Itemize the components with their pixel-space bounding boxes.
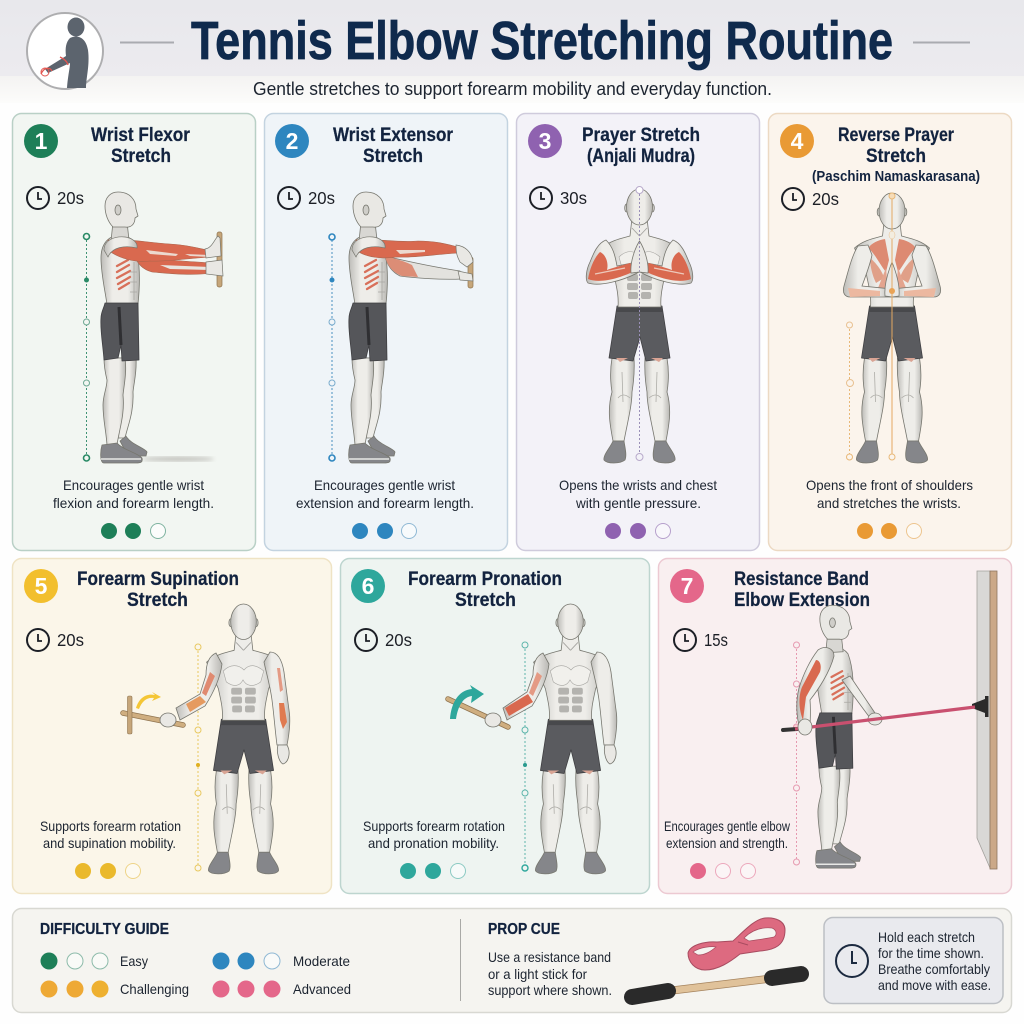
heading: Reverse Prayer: [838, 125, 955, 146]
number badge 4: 4: [791, 128, 804, 154]
heading: [333, 125, 454, 167]
number badge 1: [24, 124, 58, 158]
legend: easy: [40, 952, 148, 970]
description: with gentle pressure.: [575, 495, 701, 511]
heading: Wrist Extensor: [333, 125, 454, 146]
heading: Stretch: [455, 590, 516, 611]
description: [296, 477, 474, 511]
timer: [530, 187, 587, 209]
hold text: Hold each stretch: [878, 929, 975, 945]
description: [363, 818, 505, 851]
icon: resistance band: [688, 918, 785, 970]
difficulty dots: [75, 863, 140, 879]
timer: 20s: [308, 188, 335, 208]
alignment line: [195, 644, 201, 871]
timer: 20s: [812, 189, 839, 209]
number badge 7: [670, 569, 704, 603]
number badge 5: [24, 569, 58, 603]
number badge 4: [780, 124, 814, 158]
heading: [77, 569, 239, 611]
description: Supports forearm rotation: [363, 818, 505, 834]
panel: 2 wrist extensor stretch: [264, 114, 508, 550]
number badge 3: 3: [539, 128, 551, 154]
heading: [408, 569, 562, 611]
heading: Forearm Supination: [77, 569, 239, 590]
heading: Stretch: [866, 146, 926, 167]
timer: 20s: [57, 188, 84, 208]
heading: Stretch: [127, 590, 188, 611]
description: and supination mobility.: [43, 835, 176, 851]
difficulty dots: [605, 523, 670, 539]
prop cue text: support where shown.: [488, 982, 612, 998]
title: Tennis Elbow Stretching Routine: [191, 11, 893, 71]
description: [806, 477, 973, 511]
panel: 6 forearm pronation stretch: [340, 558, 650, 894]
header icon: silhouette with painful elbow: [27, 13, 103, 89]
description: Encourages gentle elbow: [664, 818, 791, 834]
number badge 1: 1: [35, 128, 48, 154]
difficulty dots: [101, 523, 166, 539]
wall with anchor: [972, 571, 997, 869]
alignment line: [522, 642, 528, 871]
difficulty dots: [352, 523, 416, 539]
title rule right: [913, 42, 970, 44]
description: Supports forearm rotation: [40, 818, 181, 834]
heading: prop cue: PROP CUE: [488, 921, 560, 938]
timer: [355, 629, 412, 651]
hold text: [878, 929, 991, 993]
difficulty dots: [857, 523, 922, 539]
description: extension and forearm length.: [296, 495, 474, 511]
number badge 7: 7: [681, 573, 693, 599]
heading: [582, 125, 700, 167]
prop cue text: or a light stick for: [488, 966, 587, 982]
arrow: pronation direction: [450, 685, 484, 719]
heading: difficulty guide: DIFFICULTY GUIDE: [40, 921, 169, 938]
timer: 20s: [385, 630, 412, 650]
panel: 4 reverse prayer stretch: [768, 114, 1012, 550]
alignment line: [794, 642, 800, 865]
legend: moderate: Moderate: [293, 953, 350, 969]
number badge 6: 6: [362, 573, 374, 599]
hold text: for the time shown.: [878, 945, 984, 961]
alignment line: [329, 234, 335, 461]
heading: Elbow Extension: [734, 590, 870, 611]
description: flexion and forearm length.: [53, 495, 214, 511]
number badge 6: [351, 569, 385, 603]
callout: hold instructions: [824, 918, 1003, 1004]
alignment line: [84, 234, 90, 461]
timer: [27, 187, 84, 209]
heading: Forearm Pronation: [408, 569, 562, 590]
difficulty dots: [400, 863, 466, 879]
alignment line: [846, 322, 854, 460]
legend: advanced: Advanced: [293, 981, 351, 997]
figure: front stance, forearm rotated in holding stick: [448, 604, 617, 874]
number badge 2: [275, 124, 309, 158]
panel: footer: [12, 908, 1012, 1012]
description: [53, 477, 214, 511]
figure: side stance pulling band: [783, 605, 975, 868]
heading: Stretch: [363, 146, 423, 167]
icon: stick with grips: [632, 974, 801, 997]
legend: easy: Easy: [120, 953, 148, 969]
description: [664, 818, 791, 851]
panel: 5 forearm supination stretch: [12, 558, 332, 894]
prop cue text: [488, 949, 612, 998]
timer: [782, 188, 839, 210]
figure: front stance, palms together: [586, 186, 693, 463]
legend: challenging: [40, 980, 189, 998]
description: Opens the front of shoulders: [806, 477, 973, 493]
timer: 20s: [57, 630, 84, 650]
heading: Stretch: [111, 146, 171, 167]
timer: [674, 629, 728, 651]
hold text: and move with ease.: [878, 977, 991, 993]
heading: (Paschim Namaskarasana): [812, 169, 980, 185]
subtitle: Gentle stretches to support forearm mobility and everyday function.: [253, 78, 772, 99]
timer: [278, 187, 335, 209]
description: and stretches the wrists.: [817, 495, 961, 511]
figure: side stance, hand pulled down on stick: [349, 192, 473, 463]
panel: 1 wrist flexor stretch: [12, 114, 256, 550]
icon: stopwatch: [836, 945, 868, 977]
heading: [734, 569, 870, 611]
timer: 30s: [560, 188, 587, 208]
prop cue text: Use a resistance band: [488, 949, 611, 965]
legend: moderate: [212, 952, 350, 970]
difficulty dots: [690, 863, 756, 879]
header band: [0, 0, 1024, 103]
timer: 15s: [704, 630, 728, 650]
number badge 3: [528, 124, 562, 158]
description: [559, 477, 717, 511]
heading: Wrist Flexor: [91, 125, 191, 146]
description: extension and strength.: [666, 835, 788, 851]
heading: Resistance Band: [734, 569, 869, 590]
description: [40, 818, 181, 851]
figure: back view, hands behind back: [843, 193, 941, 463]
panel: 3 prayer stretch: [516, 114, 760, 550]
heading: Prayer Stretch: [582, 125, 700, 146]
description: Encourages gentle wrist: [314, 477, 455, 493]
description: Opens the wrists and chest: [559, 477, 717, 493]
heading: [812, 125, 980, 185]
arrow: supination direction: [136, 692, 161, 709]
description: and pronation mobility.: [368, 835, 499, 851]
heading: [91, 125, 191, 167]
hold text: Breathe comfortably: [878, 961, 990, 977]
legend: challenging: Challenging: [120, 981, 189, 997]
title rule left: [120, 42, 174, 44]
description: Encourages gentle wrist: [63, 477, 204, 493]
heading: (Anjali Mudra): [587, 146, 695, 167]
panel: 7 resistance band elbow extension: [658, 558, 1012, 894]
legend: advanced: [212, 980, 351, 998]
timer: [27, 629, 84, 651]
number badge 2: 2: [286, 128, 298, 154]
figure: front stance, forearm rotated out holding stick: [123, 604, 290, 874]
figure: side stance, arms forward with stick: [101, 192, 223, 463]
number badge 5: 5: [35, 573, 48, 599]
